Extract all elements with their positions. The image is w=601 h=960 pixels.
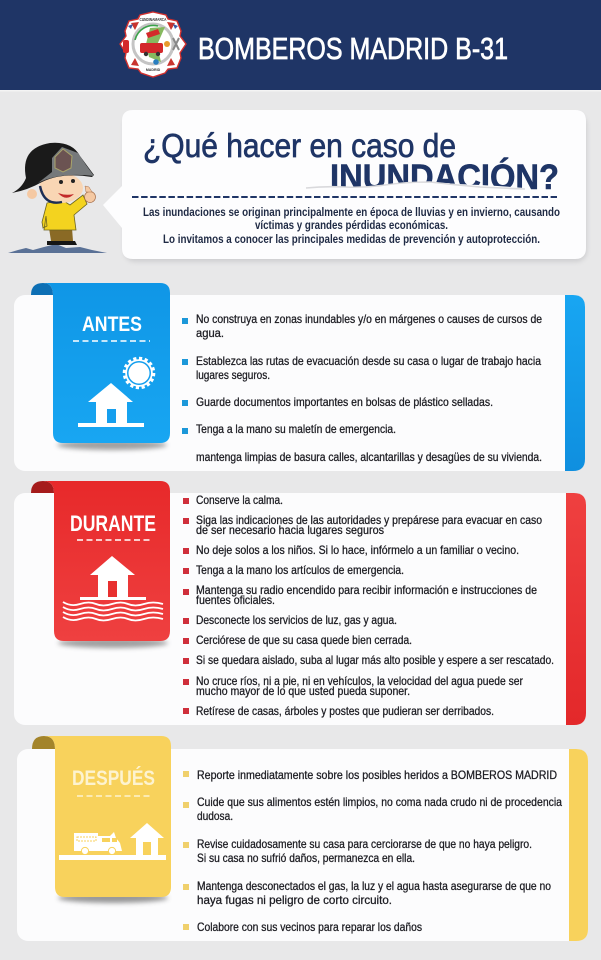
- ribbon heading: ANTES: [82, 313, 142, 336]
- list text: mantenga limpias de basura calles, alcantarillas y desagües de su vivienda.: [196, 450, 542, 464]
- title: BOMBEROS MADRID B-31: [198, 31, 508, 66]
- list text: Revise cuidadosamente su casa para cerciorarse de que no haya peligro.: [197, 837, 532, 851]
- heading: inundacion: INUNDACIÓN?: [330, 157, 559, 197]
- list text: Mantenga desconectados el gas, la luz y el agua hasta asegurarse de que no: [197, 879, 551, 893]
- list text: Si su casa no sufrió daños, permanezca en ella.: [197, 851, 415, 865]
- list text: No construya en zonas inundables y/o en márgenes o causes de cursos de: [196, 312, 542, 326]
- right colour strip: [569, 749, 588, 941]
- icon: house and sun: [78, 358, 154, 427]
- list text: agua.: [196, 326, 224, 340]
- list text: Guarde documentos importantes en bolsas de plástico selladas.: [196, 395, 493, 409]
- list text: Tenga a la mano su maletín de emergencia.: [196, 422, 396, 436]
- ribbon: [32, 736, 171, 903]
- list text: fuentes oficiales.: [196, 593, 275, 607]
- icon: firefighter kid mascot: [8, 143, 107, 253]
- logo: firefighters badge: [120, 12, 186, 77]
- list text: No deje solos a los niños. Si lo hace, infórmelo a un familiar o vecino.: [196, 543, 519, 557]
- list text: Desconecte los servicios de luz, gas y agua.: [196, 613, 397, 627]
- list text: lugares seguros.: [196, 368, 270, 382]
- speech bubble panel: [103, 110, 587, 262]
- ribbon: [31, 283, 170, 450]
- list text: Reporte inmediatamente sobre los posibles heridos a BOMBEROS MADRID: [197, 768, 557, 782]
- bullets: [183, 498, 189, 714]
- panel: durante: [14, 481, 586, 725]
- list text: dudosa.: [197, 809, 233, 823]
- list text: Establezca las rutas de evacuación desde su casa o lugar de trabajo hacia: [196, 354, 541, 368]
- list text: de ser necesario hacia lugares seguros: [196, 523, 384, 537]
- list text: Cerciórese de que su casa quede bien cerrada.: [196, 633, 412, 647]
- logo: firefighters badge: MADRID: [146, 68, 161, 72]
- header band: [0, 0, 601, 92]
- dashed divider: [132, 196, 557, 198]
- list text: Colabore con sus vecinos para reparar los daños: [197, 920, 422, 934]
- list text: [196, 493, 554, 718]
- list text: Retírese de casas, árboles y postes que pudieran ser derribados.: [196, 704, 494, 718]
- intro text: Lo invitamos a conocer las principales medidas de prevención y autoprotección.: [163, 234, 540, 246]
- icon: flooded house: [63, 556, 163, 620]
- list text: Siga las indicaciones de las autoridades y prepárese para evacuar en caso: [196, 513, 542, 527]
- right colour strip: [565, 295, 585, 471]
- list text: [197, 768, 562, 934]
- right colour strip: [566, 493, 586, 725]
- list text: Tenga a la mano los artículos de emergencia.: [196, 563, 404, 577]
- ribbon: [31, 481, 170, 648]
- list text: No cruce ríos, ni a pie, ni en vehículos, la velocidad del agua puede ser: [196, 674, 523, 688]
- list text: Mantenga su radio encendido para recibir información e instrucciones de: [196, 583, 537, 597]
- list text: Conserve la calma.: [196, 493, 283, 507]
- icon: fire truck and house: [59, 823, 166, 860]
- bullets: [182, 318, 188, 434]
- heading: que hacer: ¿Qué hacer en caso de: [143, 127, 456, 164]
- panel: despues: [17, 736, 588, 941]
- bullets: [183, 771, 189, 930]
- ribbon heading: DURANTE: [70, 511, 156, 536]
- list text: haya fugas ni peligro de corto circuito.: [197, 893, 392, 907]
- intro text: víctimas y grandes pérdidas económicas.: [255, 220, 448, 232]
- intro text: [143, 207, 560, 246]
- list text: [196, 312, 542, 464]
- ribbon heading: DESPUÉS: [72, 767, 155, 790]
- panel: antes: [14, 283, 585, 471]
- list text: mucho mayor de lo que usted pueda suponer.: [196, 684, 410, 698]
- badge text: CUNDINAMARCA: [140, 17, 166, 22]
